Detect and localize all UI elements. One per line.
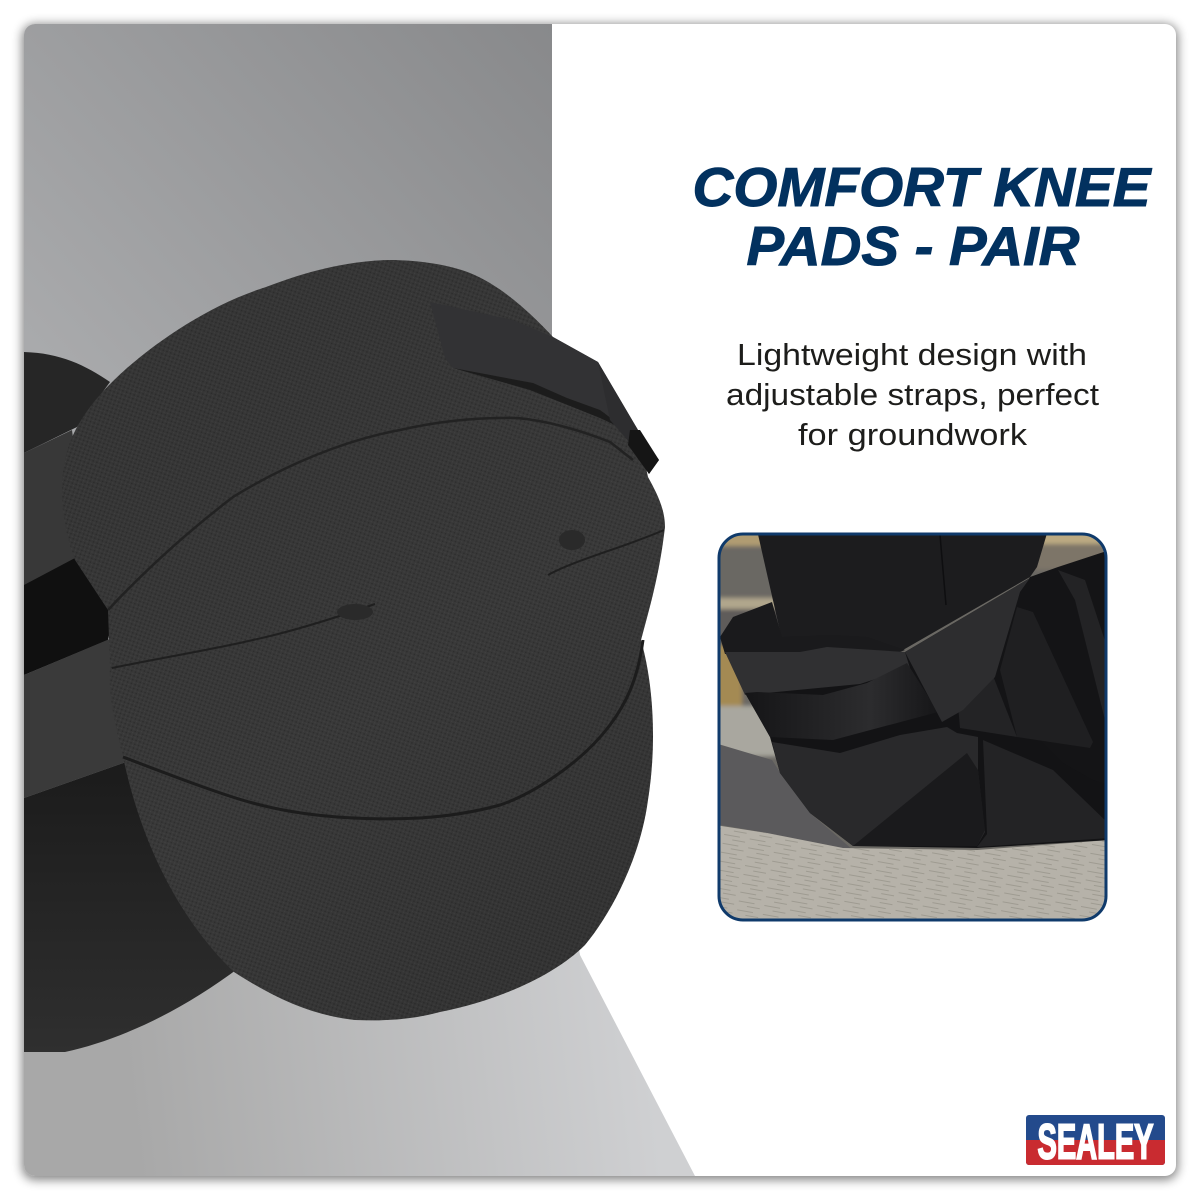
- fold left: [112, 604, 375, 668]
- description line 3: for groundwork: [798, 417, 1028, 452]
- pad body: [62, 260, 665, 1020]
- lower strap: [24, 638, 126, 798]
- title line 1: COMFORT KNEE: [692, 156, 1153, 218]
- rear pad top fleece: [24, 352, 110, 453]
- seam upper: [108, 418, 633, 610]
- wrap strap: [745, 663, 938, 740]
- description text: [726, 337, 1099, 452]
- Sealey logo: [1026, 1115, 1165, 1170]
- dark knee base: [745, 550, 1110, 848]
- pad fleece rim: [720, 602, 905, 654]
- fold right: [548, 530, 664, 575]
- strap tip: [628, 430, 659, 474]
- ground shadow: [715, 743, 853, 850]
- rear pad lower fleece: [24, 762, 240, 1052]
- dimple right: [559, 530, 585, 550]
- pad lower body: [772, 727, 985, 846]
- pad lower corner: [853, 753, 985, 846]
- logo red band: [1026, 1140, 1165, 1165]
- seam lower: [123, 640, 643, 819]
- title line 2: PADS - PAIR: [746, 215, 1080, 277]
- upper strap: [24, 430, 74, 585]
- velcro fold shadow: [454, 368, 614, 424]
- velcro strap: [432, 302, 608, 412]
- concrete: [715, 825, 1110, 925]
- side pad panel: [958, 678, 1017, 737]
- weave texture: [62, 260, 665, 1020]
- main knee pad: [62, 260, 665, 1020]
- upper grey background: [24, 24, 552, 824]
- description line 2: adjustable straps, perfect: [726, 377, 1099, 412]
- rear knee pad and straps: [24, 352, 240, 1052]
- inset border: [719, 534, 1106, 920]
- velcro strap end: [598, 362, 659, 474]
- dimple left: [337, 604, 373, 620]
- velcro flap: [905, 578, 1030, 722]
- trouser fold: [1058, 570, 1104, 717]
- pad right body: [977, 740, 1110, 847]
- product title: [692, 156, 1153, 277]
- logo blue band: [1026, 1115, 1165, 1165]
- trouser leg: [757, 530, 1048, 650]
- description line 1: Lightweight design with: [737, 337, 1087, 372]
- side tab: [1000, 607, 1093, 748]
- lower grey background: [24, 950, 695, 1176]
- photo backdrop: [720, 536, 1104, 850]
- main image panel: [24, 24, 695, 1176]
- inset photo: knee pad in use: [712, 526, 1115, 926]
- strap gap: [24, 558, 114, 675]
- right trouser: [1028, 552, 1104, 579]
- pad upper body: [725, 647, 910, 695]
